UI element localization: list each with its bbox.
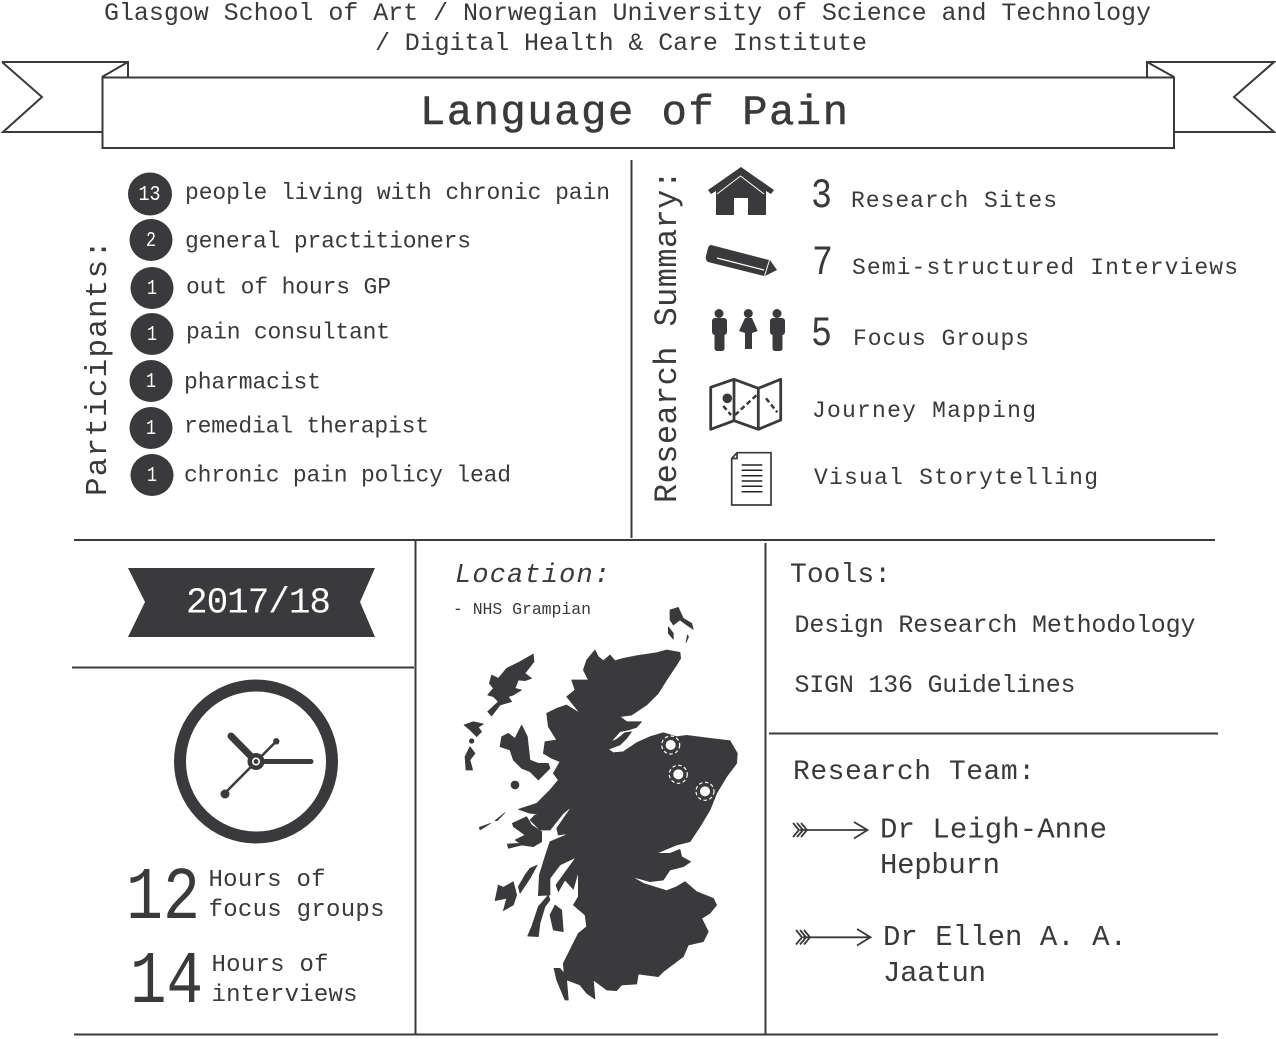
participant: remedial therapist: remedial therapist xyxy=(184,414,429,440)
icon: pencil xyxy=(706,245,777,276)
Mull xyxy=(507,817,542,848)
team member: Ellen A. A. Jaatun: Jaatun xyxy=(883,957,986,990)
team member: Leigh-Anne Hepburn: Hepburn xyxy=(880,849,1000,882)
icon: map xyxy=(711,379,781,429)
header: institutions: / Digital Health & Care Institute xyxy=(375,29,867,58)
participant: people living with chronic pain: 13 xyxy=(138,184,160,207)
header: institutions xyxy=(104,0,1151,58)
Lewis and Harris xyxy=(488,654,534,716)
focus groups xyxy=(811,310,1029,358)
team member: Leigh-Anne Hepburn: Dr Leigh-Anne xyxy=(880,814,1107,846)
research sites: Research Sites xyxy=(851,188,1057,214)
participant: chronic pain policy lead xyxy=(130,454,511,496)
Uists xyxy=(464,722,483,770)
location heading: Location: xyxy=(455,561,610,591)
participants heading: Participants: xyxy=(81,240,116,496)
stat: 12 hours of focus groups: 12 xyxy=(126,857,200,941)
year banner xyxy=(128,568,375,637)
stat: 14 hours of interviews xyxy=(130,941,358,1025)
icon: arrow 2 xyxy=(796,929,870,946)
participant: people living with chronic pain: people living with chronic pain xyxy=(185,180,610,206)
tools list: Design Research Methodology xyxy=(794,611,1196,640)
visual storytelling: Visual Storytelling xyxy=(814,465,1098,491)
research sites: 3 xyxy=(811,172,832,220)
panel: research summary xyxy=(649,167,1238,505)
small islands xyxy=(469,739,519,830)
stat: 14 hours of interviews: 14 xyxy=(130,941,203,1025)
participant: pain consultant: 1 xyxy=(147,324,157,347)
semi-structured interviews: 7 xyxy=(812,239,833,287)
icon: people xyxy=(712,309,785,351)
Arran xyxy=(550,905,563,932)
participant: chronic pain policy lead: 1 xyxy=(147,465,157,488)
site markers xyxy=(666,740,710,796)
participant: out of hours GP: out of hours GP xyxy=(186,274,391,300)
tools heading: Tools: xyxy=(790,560,891,591)
title: Language of Pain xyxy=(420,89,848,137)
icon: document xyxy=(732,453,771,505)
team member: Ellen A. A. Jaatun: Dr Ellen A. A. xyxy=(883,921,1127,954)
tools list: SIGN 136 Guidelines xyxy=(794,671,1076,700)
Kintyre xyxy=(528,895,550,937)
divider lines xyxy=(72,160,1218,1034)
journey mapping: Journey Mapping xyxy=(812,398,1036,424)
icon: house xyxy=(708,167,774,215)
participant: pain consultant xyxy=(130,313,390,355)
semi-structured interviews: Semi-structured Interviews xyxy=(852,255,1238,281)
stat: 14 hours of interviews: interviews xyxy=(212,982,358,1009)
stat: 12 hours of focus groups: Hours of xyxy=(208,867,326,894)
participant: out of hours GP: 1 xyxy=(147,278,157,301)
icon: clock xyxy=(180,686,332,838)
year banner: 2017/18 xyxy=(186,582,331,624)
Orkney xyxy=(668,607,693,643)
participant: remedial therapist: 1 xyxy=(146,418,156,441)
focus groups: 5 xyxy=(811,310,832,358)
participant: pharmacist: pharmacist xyxy=(184,370,321,396)
participant: pharmacist xyxy=(130,360,321,402)
participant: out of hours GP xyxy=(130,267,391,309)
title ribbon xyxy=(2,62,1274,148)
panel: participants xyxy=(81,172,610,496)
team member: Leigh-Anne Hepburn xyxy=(880,814,1107,882)
focus groups: Focus Groups xyxy=(853,326,1029,352)
Skye xyxy=(500,725,550,780)
research sites xyxy=(811,172,1057,220)
stat: 12 hours of focus groups xyxy=(126,857,384,941)
team member: Ellen A. A. Jaatun xyxy=(883,921,1127,990)
participant: chronic pain policy lead: chronic pain policy lead xyxy=(184,462,511,488)
icon: arrow 1 xyxy=(793,822,868,838)
participant: general practitioners: general practitioners xyxy=(185,228,471,254)
map of Scotland xyxy=(464,607,737,1000)
semi-structured interviews xyxy=(812,239,1238,287)
participant: pharmacist: 1 xyxy=(146,371,156,394)
research site markers rings xyxy=(662,736,714,800)
participant: general practitioners: 2 xyxy=(146,230,156,253)
stat: 14 hours of interviews: Hours of xyxy=(212,952,328,979)
Islay and Jura xyxy=(495,865,537,911)
location name: - NHS Grampian xyxy=(453,600,591,619)
stat: 12 hours of focus groups: focus groups xyxy=(208,897,384,924)
research team heading: Research Team: xyxy=(793,757,1035,788)
participant: general practitioners xyxy=(130,219,471,261)
research summary heading: Research Summary: xyxy=(649,170,686,503)
participant: pain consultant: pain consultant xyxy=(186,320,390,346)
tools list xyxy=(794,611,1196,700)
participant: people living with chronic pain xyxy=(128,172,610,216)
participant: remedial therapist xyxy=(130,407,429,449)
